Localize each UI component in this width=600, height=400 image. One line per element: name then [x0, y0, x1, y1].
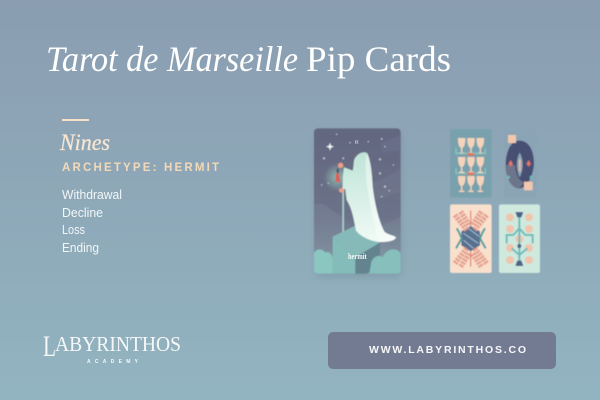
stars	[321, 134, 394, 197]
lantern glow	[324, 163, 352, 191]
heading: Nines: Nines	[59, 130, 110, 155]
staff	[342, 187, 344, 237]
archetype label: ARCHETYPE: HERMIT	[62, 162, 219, 174]
hands	[338, 163, 343, 168]
card name: hermit	[348, 252, 367, 261]
button: website	[328, 332, 556, 369]
title: Tarot de Marseille	[46, 39, 298, 79]
keyword list: Loss	[62, 223, 85, 237]
clouds	[314, 249, 333, 274]
card: nine of cups	[450, 129, 492, 198]
keyword list: Ending	[62, 241, 99, 255]
keyword list	[62, 188, 122, 255]
logo: Labyrinthos Academy: ACADEMY	[87, 359, 139, 365]
card: nine of wands	[450, 204, 492, 273]
logo: Labyrinthos Academy	[43, 330, 181, 365]
button: website: WWW.LABYRINTHOS.CO	[369, 344, 526, 356]
lantern	[335, 173, 340, 182]
cloak figure	[343, 152, 396, 242]
cloud bands	[372, 168, 401, 200]
card: nine of coins	[499, 204, 540, 273]
card: nine of swords	[504, 129, 537, 198]
keyword list: Withdrawal	[62, 188, 122, 202]
logo: Labyrinthos Academy: L	[43, 330, 56, 363]
card: hermit	[314, 128, 401, 277]
pedestal	[333, 225, 380, 257]
panel: Nines text block	[59, 119, 219, 255]
keyword list: Decline	[62, 206, 103, 220]
title: Pip Cards	[306, 39, 451, 79]
icon: star	[326, 143, 334, 151]
title	[46, 39, 451, 79]
logo: Labyrinthos Academy: ABYRINTHOS	[55, 332, 181, 356]
pip cards group	[450, 129, 540, 273]
numeral: IX	[355, 141, 359, 145]
